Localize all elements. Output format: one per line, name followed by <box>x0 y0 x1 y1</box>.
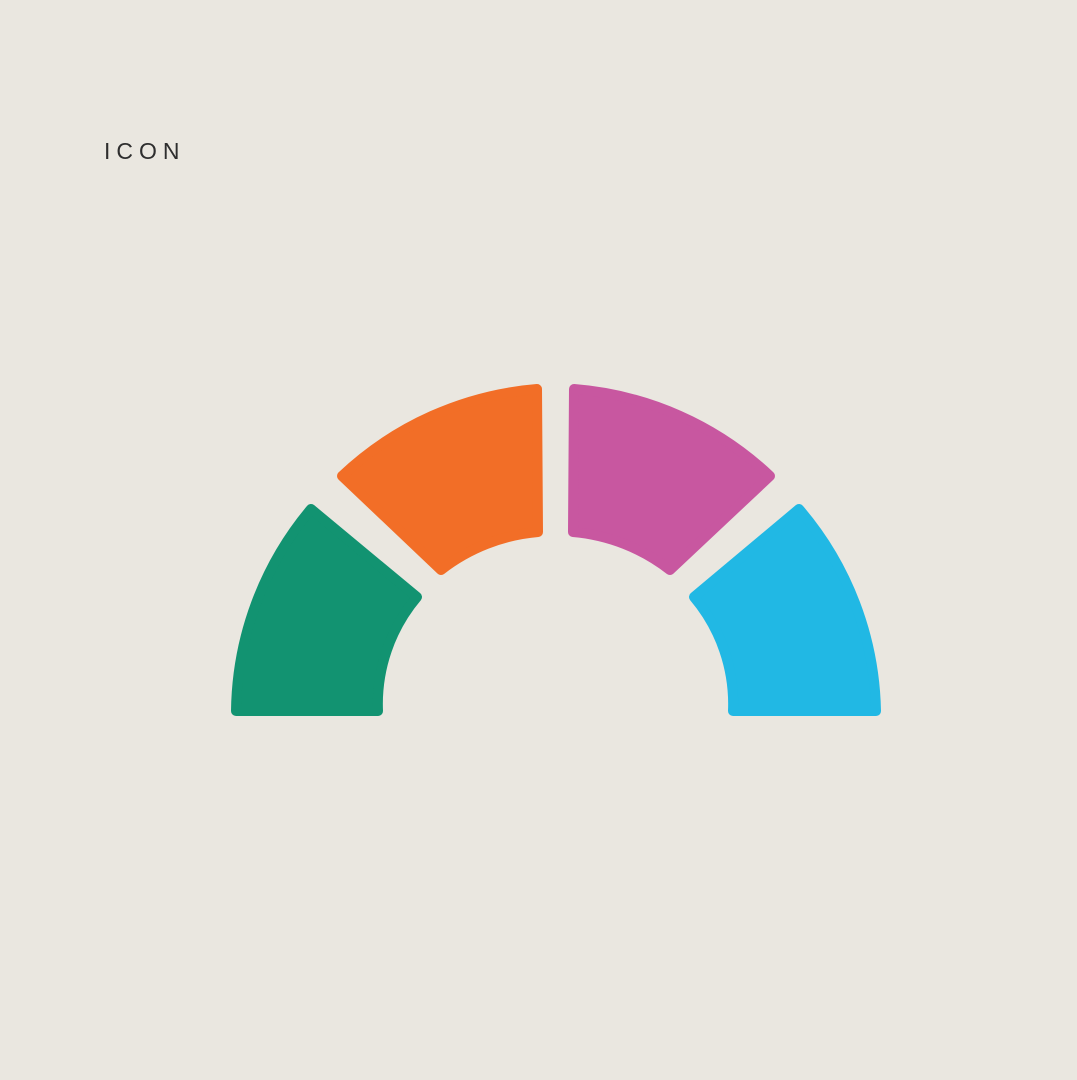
segment: orange <box>342 389 538 570</box>
segment: purple <box>573 389 770 570</box>
segment: green <box>236 509 417 711</box>
title: ICON <box>104 138 186 164</box>
segment: blue <box>694 509 876 711</box>
